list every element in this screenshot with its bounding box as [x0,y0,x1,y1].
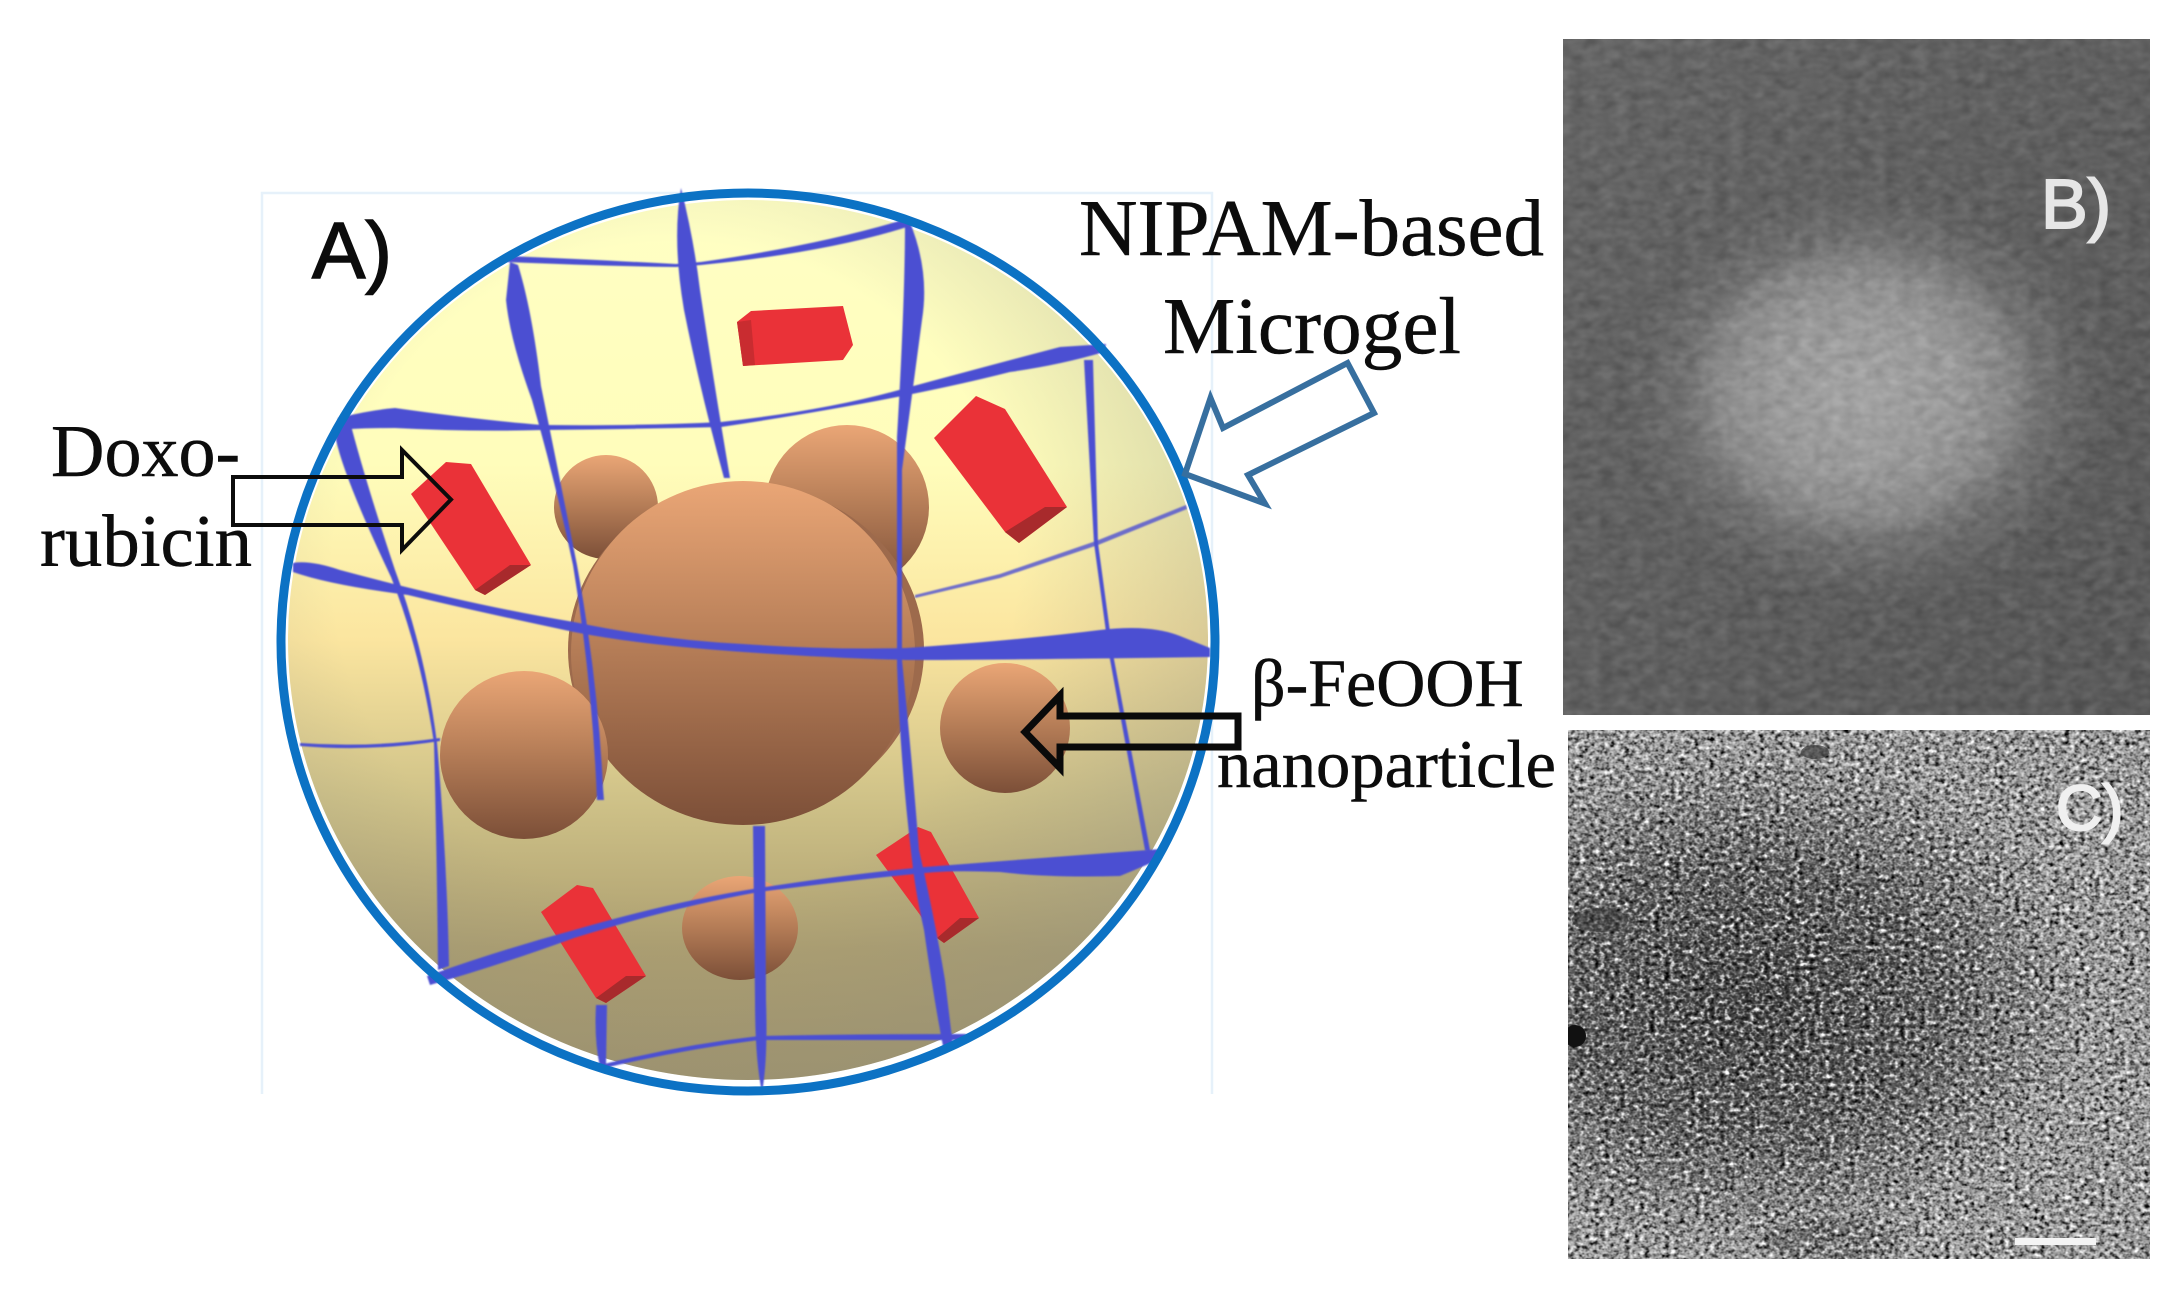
doxorubicin red blocks [411,306,1067,1003]
panel B: micrograph [1563,39,2150,715]
microgel blue outline [281,193,1215,1091]
arrow: microgel pointer [1185,363,1374,504]
arrow: doxorubicin pointer [233,450,451,550]
panel label B: B) [2041,165,2111,243]
label: Doxorubicin [40,411,252,583]
microgel sphere body [283,195,1213,1089]
scale bar [2015,1238,2096,1245]
faint image frame [262,193,1212,1094]
panel C: micrograph [1564,730,2150,1262]
panel label C: C) [2056,772,2124,844]
label: Doxorubicin: Doxo- [51,411,240,493]
iron oxide nanoparticles [440,425,1070,980]
label: NIPAM-based Microgel [1079,185,1544,371]
label: beta-FeOOH nanoparticle: nanoparticle [1217,726,1556,802]
label: Doxorubicin: rubicin [40,501,252,583]
label: NIPAM-based Microgel: Microgel [1163,283,1461,371]
label: beta-FeOOH nanoparticle [1217,645,1556,802]
arrow: nanoparticle pointer [1025,696,1238,768]
label: beta-FeOOH nanoparticle: β-FeOOH [1251,645,1524,721]
panel label A: A) [312,206,392,295]
polymer network strands [293,188,1210,1092]
label: NIPAM-based Microgel: NIPAM-based [1079,185,1544,273]
panel A: microgel schematic [262,188,1215,1094]
